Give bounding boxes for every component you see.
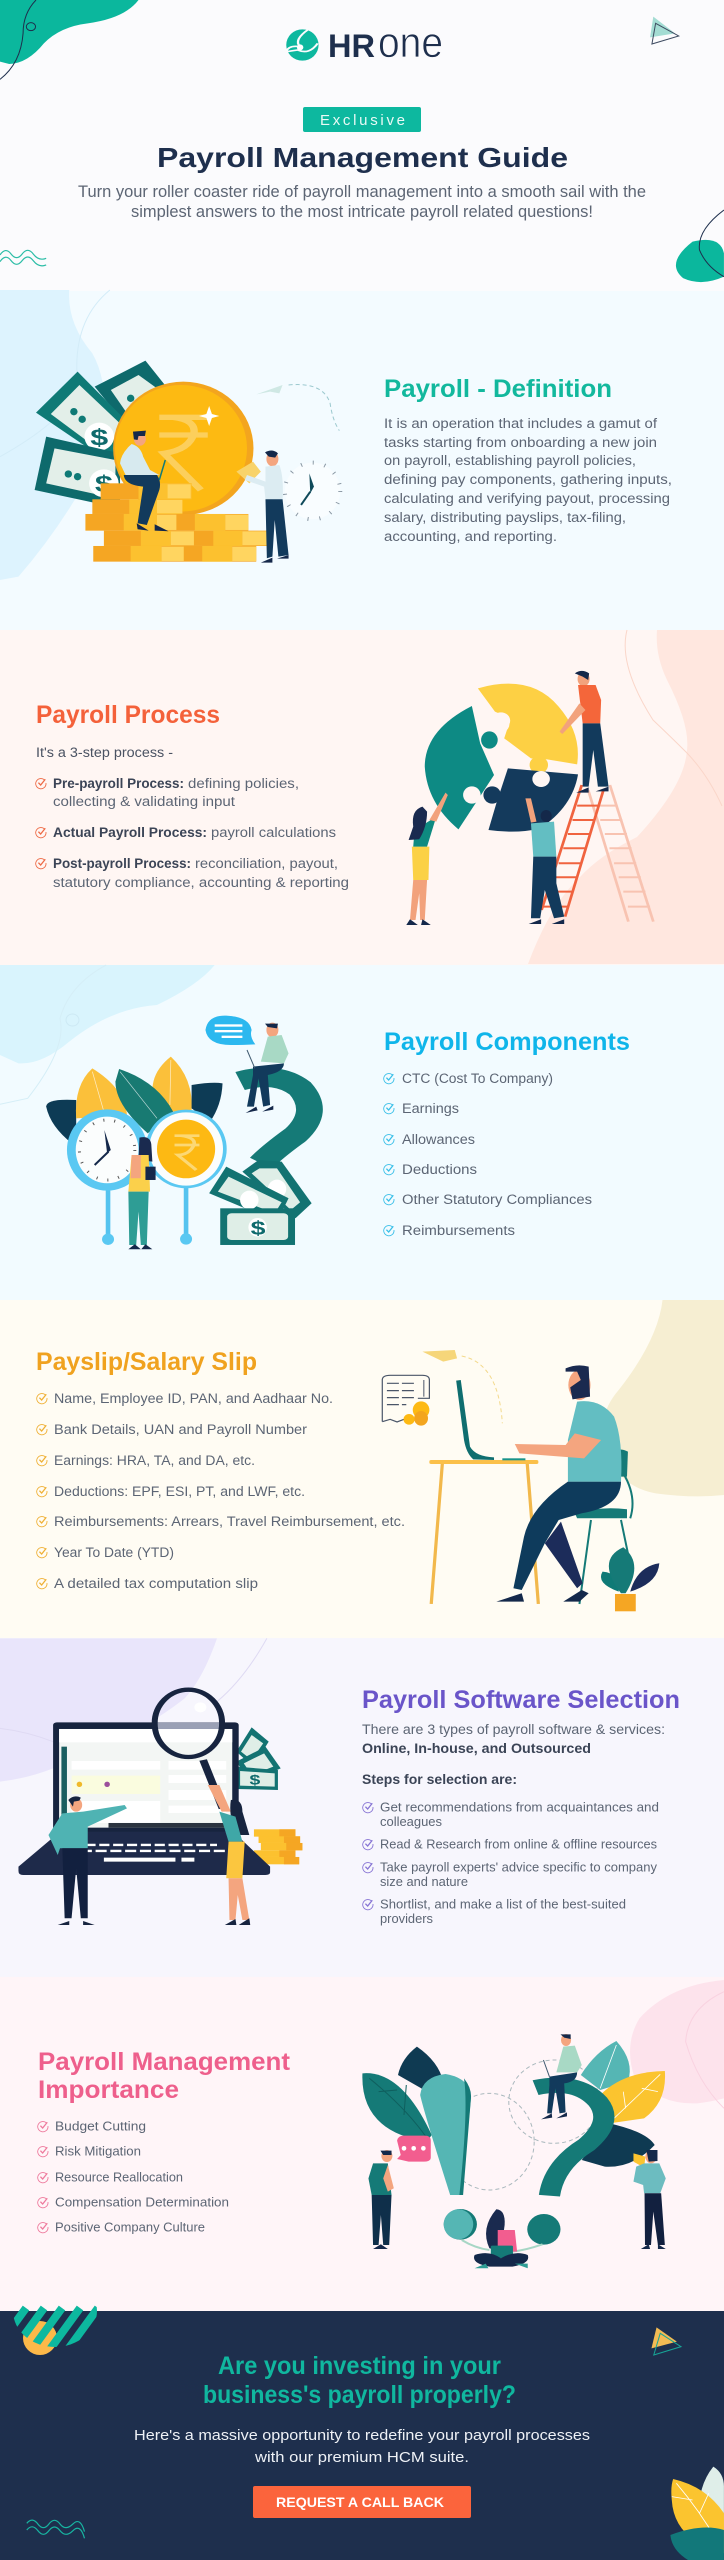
intro text [362,1722,665,1756]
heading: Importance [38,2076,179,2104]
logo: HR [328,28,375,64]
CTA text: Here's a massive opportunity to redefine your payroll processes [134,2427,590,2444]
chair [575,1450,633,1604]
step: actual payroll: payroll calculations [211,825,336,840]
logo [286,19,443,67]
illustration: laptop and magnifier [18,1690,302,1925]
magnifier [155,1690,223,1808]
step: post-payroll [36,856,349,890]
definition text: on payroll, establishing payroll policies, [384,453,636,468]
decoration: header shapes [0,0,724,282]
payslip list [37,1391,405,1591]
selection steps [363,1800,659,1926]
bills: $ [90,424,109,450]
panel: Payroll process [0,630,724,965]
decoration: cream shape [602,1300,724,1496]
panel: Payslip [0,1300,724,1638]
importance list: Budget Cutting [55,2120,146,2134]
step: pre-payroll [36,776,299,809]
payslip list: Bank Details, UAN and Payroll Number [54,1422,308,1437]
selection steps: Get recommendations from acquaintances and [380,1800,659,1814]
standing man [236,451,289,563]
illustration: question and exclamation marks [362,2034,666,2268]
heading: Payroll - Definition [384,375,612,403]
components list [384,1071,592,1238]
selection steps: colleagues [380,1815,442,1829]
components list: CTC (Cost To Company) [402,1071,553,1086]
bills [209,1160,312,1245]
payslip list: Name, Employee ID, PAN, and Aadhaar No. [54,1391,333,1406]
importance list [38,2120,229,2234]
intro text: It's a 3-step process - [36,745,173,760]
panel: Payroll importance [0,1977,724,2311]
payslip list: A detailed tax computation slip [54,1576,258,1591]
CTA heading [203,2352,516,2409]
components list: Earnings [402,1101,459,1116]
decoration: pink blob [630,1980,724,2108]
definition text [384,416,672,544]
decoration: blue blob [0,290,110,580]
clock [285,463,340,519]
definition text: calculating and verifying payout, processing [384,491,670,506]
man thinking [368,2150,394,2249]
definition text: It is an operation that includes a gamut of [384,416,657,431]
illustration: puzzle team [406,671,653,925]
badge: Exclusive: Exclusive [320,112,405,129]
subtitle: simplest answers to the most intricate payroll related questions! [131,203,593,221]
step: post-payroll: reconciliation, payout, [195,856,338,871]
button: REQUEST A CALL BACK [276,2494,444,2510]
desk [429,1460,538,1604]
dashed circles [445,2060,599,2190]
laptop [456,1380,525,1460]
selection steps: providers [380,1912,433,1926]
importance list: Risk Mitigation [55,2144,141,2158]
paper plane [422,1350,502,1423]
rupee coin [113,382,253,515]
gold bricks [85,483,267,562]
leaves [46,1057,223,1147]
decoration: sky blob [0,965,215,1104]
man on ladder [560,671,609,793]
subtitle [78,183,646,221]
components list: Reimbursements [402,1223,515,1238]
heading: Payroll Components [384,1028,630,1056]
payslip receipt [382,1375,429,1426]
man on question mark [541,2034,582,2119]
puzzle pieces [425,684,578,832]
heading: Payslip/Salary Slip [36,1348,257,1376]
question mark [240,1077,309,1163]
payslip list: Earnings: HRA, TA, and DA, etc. [54,1453,255,1468]
step: post-payroll: statutory compliance, accounting & reporting [53,875,349,890]
bills [35,361,166,508]
intro text: Online, In-house, and Outsourced [362,1741,591,1756]
decoration: striped circle [14,2306,97,2355]
selection steps: Shortlist, and make a list of the best-suited [380,1898,626,1912]
illustration: coin stack and money [35,361,340,563]
importance list: Compensation Determination [55,2196,229,2210]
step: pre-payroll: defining policies, [188,776,299,791]
bills: $ [95,470,113,497]
panel: header [0,0,724,291]
clock on stem [67,1109,147,1245]
man with megaphone [633,2150,666,2249]
heading: Payroll Software Selection [362,1686,680,1714]
importance list: Resource Reallocation [55,2170,183,2184]
intro text: There are 3 types of payroll software & services: [362,1722,665,1737]
speech bubble [205,1016,255,1045]
heading: Payroll Management [38,2048,291,2076]
definition text: salary, distributing payslips, tax-filing, [384,510,626,525]
title: Payroll Management Guide [157,142,568,173]
payslip list: Year To Date (YTD) [54,1545,174,1560]
heading [38,2048,291,2104]
selection steps: Read & Research from online & offline resources [380,1838,657,1852]
sitting man [120,431,169,531]
payslip list: Deductions: EPF, ESI, PT, and LWF, etc. [54,1484,305,1499]
button [253,2486,471,2518]
coin on stem [145,1110,227,1245]
components list: Allowances [402,1132,475,1147]
badge: Exclusive [303,107,421,132]
plant [601,1547,659,1611]
CTA heading: business's payroll properly? [203,2381,516,2409]
panel: Software selection [0,1638,724,1977]
step: actual payroll [36,825,336,840]
bills [236,1727,281,1790]
decoration: peach shape [528,630,724,964]
woman with laptop [462,2209,542,2268]
laptop [18,1722,270,1875]
subheading: Steps for selection are: [362,1772,517,1787]
step: post-payroll: Post-payroll Process: [53,856,191,871]
CTA heading: Are you investing in your [218,2352,501,2380]
decoration: footer shapes [27,2327,724,2560]
left leaves [362,2047,443,2142]
panel: Payroll components [0,965,724,1300]
bills: $ [249,1772,261,1788]
definition text: defining pay components, gathering inputs, [384,472,672,487]
ladder [542,785,653,922]
illustration: clock, coin and question mark [46,1016,312,1249]
man holding puzzle [525,798,564,924]
importance list: Positive Company Culture [55,2220,205,2234]
exclamation mark [420,2074,477,2240]
question mark [527,2085,604,2245]
speech bubble [397,2136,431,2162]
definition text: accounting, and reporting. [384,529,557,544]
paper plane [256,385,339,431]
panel: call to action [0,2308,724,2560]
definition text: tasks starting from onboarding a new join [384,435,657,450]
right leaves [581,2041,665,2167]
woman [406,793,448,925]
subtitle: Turn your roller coaster ride of payroll management into a smooth sail with the [78,183,646,201]
woman with tablet [128,1137,156,1249]
gold coins [254,1829,302,1864]
decoration: lilac blob [0,1638,267,1782]
CTA text: with our premium HCM suite. [254,2449,469,2466]
payslip list: Reimbursements: Arrears, Travel Reimbursement, etc. [54,1514,405,1529]
selection steps: Take payroll experts' advice specific to company [380,1860,658,1874]
step: pre-payroll: Pre-payroll Process: [53,776,184,791]
components list: Deductions [402,1162,477,1177]
man pointing [48,1796,127,1925]
components list: Other Statutory Compliances [402,1192,592,1207]
man on question mark [246,1023,289,1113]
logo: one [378,19,443,67]
illustration: man at desk [382,1350,659,1611]
heading: Payroll Process [36,701,220,729]
bills: $ [251,1217,266,1238]
man [496,1365,621,1602]
selection steps: size and nature [380,1875,468,1889]
CTA text [134,2427,590,2466]
woman with magnifier [208,1785,250,1925]
panel: Payroll definition [0,290,724,630]
step: actual payroll: Actual Payroll Process: [53,825,207,840]
step: pre-payroll: collecting & validating input [53,794,235,809]
